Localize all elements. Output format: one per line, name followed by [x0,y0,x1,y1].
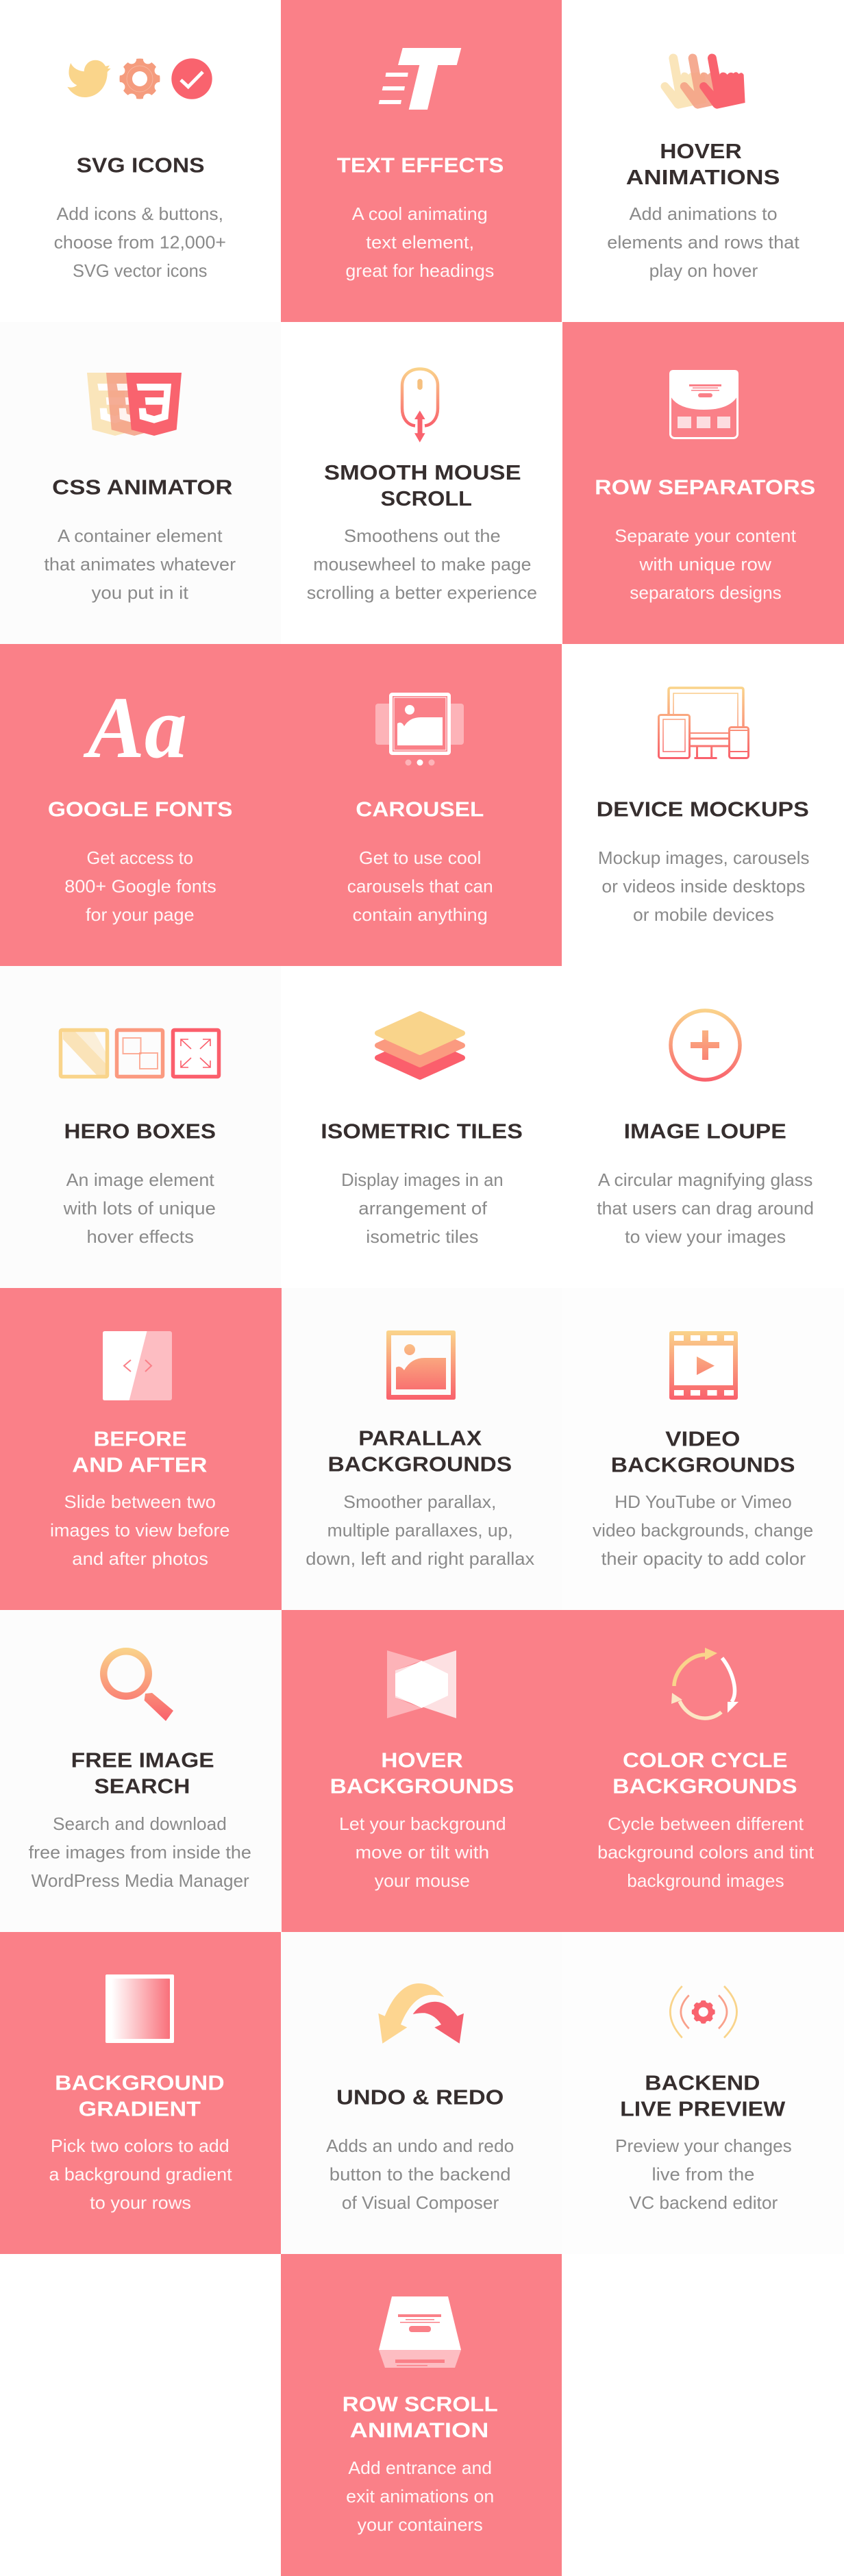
heading: CSS ANIMATOR [52,475,232,499]
heading: BACKGROUNDS [327,1452,512,1476]
icon: color cycle arrows [671,1648,738,1718]
description: with unique row [638,554,771,574]
description: contain anything [353,904,488,925]
description [64,847,216,925]
description: hover effects [86,1226,194,1247]
description: A circular magnifying glass [598,1169,812,1190]
heading: BACKEND [645,2071,760,2095]
icon: CSS3 shields [87,373,182,436]
description: that users can drag around [597,1198,814,1218]
description [598,847,810,925]
panel: Undo and Redo [281,1932,562,2254]
panel: CSS Animator [0,322,281,644]
description: carousels that can [347,876,493,896]
description: with lots of unique [63,1198,216,1218]
description: arrangement of [358,1198,488,1218]
description [346,2457,494,2535]
description: Smoother parallax, [343,1491,496,1512]
description: that animates whatever [44,554,236,574]
description: Pick two colors to add [51,2135,229,2156]
description: their opacity to add color [601,1548,806,1569]
description: of Visual Composer [342,2192,499,2213]
icon: speeding letter T [379,48,461,110]
description: A container element [58,525,223,546]
description: to view your images [625,1226,786,1247]
panel: Carousel [281,644,562,966]
heading: ROW SCROLL [343,2392,498,2416]
heading: SEARCH [95,1774,190,1798]
icon: film strip with play [669,1331,738,1400]
description [345,203,494,281]
description: your containers [358,2514,483,2535]
heading: ISOMETRIC TILES [321,1119,523,1143]
description: your mouse [375,1870,470,1891]
description: 800+ Google fonts [64,876,216,896]
description [347,847,493,925]
description: video backgrounds, change [593,1520,813,1540]
heading: FREE IMAGE [71,1748,214,1772]
description: Get to use cool [359,847,481,868]
heading [611,1427,795,1477]
icon: twitter, gear and check badge [67,54,212,103]
description: Add entrance and [348,2457,492,2478]
heading [620,2071,786,2121]
description: Adds an undo and redo [326,2135,514,2156]
description [307,525,537,603]
heading: TEXT EFFECTS [337,153,504,177]
heading: DEVICE MOCKUPS [597,797,809,821]
heading: BACKGROUND [55,2071,225,2095]
description [597,1169,814,1247]
panel: Free Image Search [0,1610,282,1932]
description: Search and download [53,1813,227,1834]
description: Preview your changes [615,2135,792,2156]
heading [626,139,780,189]
description: elements and rows that [607,232,800,252]
icon: gradient swatch [106,1974,174,2043]
description: Mockup images, carousels [598,847,810,868]
icon: framed landscape [386,1330,456,1400]
description [339,1813,506,1891]
icon: three pointer hands [660,53,745,109]
description: choose from 12,000+ [54,232,226,252]
description [341,1169,504,1247]
heading [71,1748,214,1798]
description: Separate your content [615,525,797,546]
heading: BEFORE [94,1427,187,1451]
heading: ROW SEPARATORS [595,475,815,499]
description: Add icons & buttons, [56,203,223,224]
description: images to view before [50,1520,230,1540]
description: Cycle between different [608,1813,804,1834]
heading: HOVER [660,139,742,163]
description: background images [627,1870,784,1891]
icon: serif Aa: Aa [83,679,187,776]
heading [343,2392,498,2442]
description: mousewheel to make page [313,554,532,574]
heading: SCROLL [381,486,472,510]
description: WordPress Media Manager [32,1870,249,1891]
description: move or tilt with [356,1842,489,1862]
description: to your rows [90,2192,191,2213]
panel: Before and After [0,1288,282,1610]
description: SVG vector icons [73,260,207,281]
heading: SVG ICONS [77,153,205,177]
panel: Image Loupe [562,966,844,1288]
heading: CAROUSEL [356,797,484,821]
icon: desktop, tablet and phone [659,688,748,758]
description: play on hover [649,260,758,281]
panel: Backend Live Preview [562,1932,844,2254]
heading: BACKGROUNDS [611,1453,795,1477]
description: An image element [66,1169,214,1190]
panel: Hover Animations [562,0,844,322]
description [593,1491,813,1569]
description: or mobile devices [633,904,774,925]
heading [327,1426,512,1476]
icon: before and after slider [103,1331,172,1400]
heading [324,460,521,510]
description: A cool animating [352,203,488,224]
heading [72,1427,207,1477]
description [615,525,797,603]
heading: LIVE PREVIEW [620,2097,786,2121]
description [29,1813,251,1891]
description: scrolling a better experience [307,582,537,603]
heading: GRADIENT [79,2097,201,2121]
heading [55,2071,225,2121]
icon: image carousel [375,695,464,766]
description: you put in it [92,582,189,603]
description: background colors and tint [597,1842,815,1862]
icon: stacked isometric tiles [377,1014,462,1077]
description: separators designs [630,582,782,603]
description: Smoothens out the [344,525,501,546]
description: down, left and right parallax [306,1548,534,1569]
description [607,203,800,281]
description [49,2135,232,2213]
heading: AND AFTER [72,1453,207,1477]
panel: Text Effects [281,0,562,322]
description: Get access to [86,847,193,868]
heading: PARALLAX [358,1426,482,1450]
panel: Parallax Backgrounds [282,1288,562,1610]
heading [330,1748,514,1798]
panel: Device Mockups [562,644,844,966]
description: free images from inside the [29,1842,251,1862]
heading: HERO BOXES [64,1119,216,1143]
description: exit animations on [346,2486,494,2506]
description: live from the [652,2164,755,2184]
description [44,525,236,603]
description [63,1169,216,1247]
description: VC backend editor [629,2192,778,2213]
panel: Google Fonts [0,644,281,966]
description [597,1813,815,1891]
panel: Row Separators [562,322,844,644]
panel: Isometric Tiles [281,966,562,1288]
heading [612,1748,797,1798]
description: text element, [366,232,474,252]
description: and after photos [72,1548,208,1569]
description [50,1491,230,1569]
panel: Smooth Mouse Scroll [281,322,562,644]
heading: IMAGE LOUPE [624,1119,786,1143]
description [54,203,226,281]
description: a background gradient [49,2164,232,2184]
description: Let your background [339,1813,506,1834]
heading: COLOR CYCLE [623,1748,788,1772]
icon: gear broadcasting [670,1986,737,2038]
description: Display images in an [341,1169,504,1190]
heading: BACKGROUNDS [612,1774,797,1798]
panel: Hero Boxes [0,966,281,1288]
icon: tilting background [387,1650,456,1718]
heading: ANIMATIONS [626,165,780,189]
heading: HOVER [381,1748,463,1772]
description [615,2135,792,2213]
panel: Color Cycle Backgrounds [562,1610,844,1932]
heading: SMOOTH MOUSE [324,460,521,484]
icon: undo and redo arrows [378,1983,464,2044]
description: HD YouTube or Vimeo [615,1491,792,1512]
icon: three hero boxes [60,1030,219,1077]
description: multiple parallaxes, up, [327,1520,513,1540]
panel: Background Gradient [0,1932,281,2254]
description: Slide between two [64,1491,216,1512]
heading: GOOGLE FONTS [48,797,232,821]
heading: BACKGROUNDS [330,1774,514,1798]
panel: Row Scroll Animation [281,2254,562,2576]
description [326,2135,514,2213]
icon: magnifying glass [100,1648,173,1721]
icon: mouse with scroll arrow [402,369,438,443]
description: Add animations to [629,203,778,224]
panel: Video Backgrounds [562,1288,844,1610]
panel: SVG Icons [0,0,281,322]
description: great for headings [345,260,494,281]
icon: row separators page [669,370,738,438]
icon: loupe with plus [671,1011,740,1080]
heading: ANIMATION [350,2418,488,2442]
description: for your page [86,904,195,925]
description: or videos inside desktops [601,876,805,896]
icon: tilted row page [379,2296,461,2368]
panel: Hover Backgrounds [282,1610,562,1932]
description [306,1491,534,1569]
heading: UNDO & REDO [336,2085,504,2109]
heading: VIDEO [665,1427,740,1451]
description: button to the backend [330,2164,511,2184]
description: isometric tiles [366,1226,478,1247]
